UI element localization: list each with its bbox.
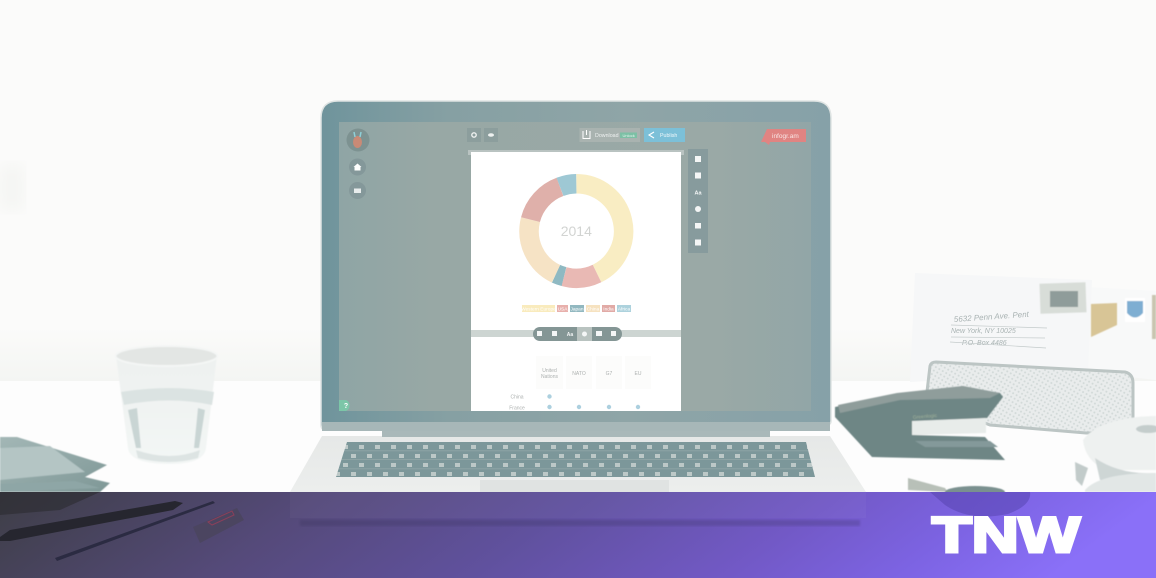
document page 2: table: China: [510, 394, 524, 400]
help button: ?: [344, 403, 348, 410]
chart legend: Japan: [570, 306, 584, 312]
infogram logo: [761, 129, 806, 145]
pencil: [55, 501, 215, 561]
document page 1 with handles: [468, 150, 684, 330]
help button: [339, 400, 350, 411]
mail button: [349, 182, 366, 199]
eraser: [193, 508, 244, 543]
floating toolbar: Aa: [567, 332, 573, 338]
settings button: [467, 128, 481, 142]
download button: Download: [595, 133, 619, 139]
home button: [349, 158, 366, 176]
envelopes: [910, 273, 1156, 382]
publish button: [644, 128, 685, 142]
handwritten address: 5632 Penn Ave. Pent: [954, 310, 1030, 324]
chart legend: Western Europe: [521, 306, 556, 312]
side toolbar: [688, 149, 708, 253]
laptop base: [290, 436, 866, 492]
document page 2: table: EU: [635, 371, 642, 377]
document page 2: table: NATO: [572, 371, 586, 377]
document page 2: table: France: [509, 406, 525, 412]
keys: [908, 478, 1005, 498]
handwritten address: New York, NY 10025: [951, 328, 1016, 335]
avatar icon: [346, 128, 370, 152]
keyboard: [336, 442, 815, 477]
donut chart: [529, 184, 624, 278]
pen: [0, 501, 183, 541]
desk surface: [0, 381, 1156, 492]
stapler: [835, 386, 1005, 460]
infogram logo: infogr.am: [772, 133, 799, 140]
publish button: Publish: [660, 133, 677, 139]
bottom brand bar: [0, 492, 1156, 578]
trackpad: [480, 480, 669, 492]
laptop: [290, 101, 866, 492]
side toolbar: Aa: [694, 190, 702, 196]
hinge: [382, 424, 770, 437]
preview button: [484, 128, 498, 142]
document page 2: table: G7: [606, 371, 613, 377]
background: wall and window light: [0, 0, 1156, 381]
drinking glass: [116, 346, 218, 464]
document page 2: table: [471, 337, 681, 412]
handwritten address: P.O. Box 4486: [962, 340, 1007, 347]
TNW logo: TNW: [932, 507, 1081, 563]
wallet: [0, 437, 110, 492]
page divider band: [471, 330, 681, 337]
download button: Unlock: [622, 133, 635, 138]
chart legend: Africa: [618, 306, 630, 312]
handwritten address: [950, 310, 1047, 348]
hole punch: [1075, 416, 1156, 492]
app screen: [339, 122, 811, 411]
document page 2: table: United: [542, 368, 557, 374]
chart legend: [521, 305, 631, 312]
chart legend: USA: [558, 306, 568, 312]
laptop lid: [321, 101, 831, 430]
stamps: [1039, 282, 1156, 339]
donut centre label: 2014: [561, 223, 592, 239]
reflections under bar: [0, 492, 1030, 526]
mesh tray: [926, 362, 1133, 433]
stapler: Greenlogic: [913, 413, 938, 421]
document page 2: table: Nations: [541, 374, 558, 380]
download button: [580, 128, 640, 142]
chart legend: China: [587, 306, 600, 312]
floating toolbar: [533, 327, 622, 341]
chart legend: India: [603, 306, 614, 312]
